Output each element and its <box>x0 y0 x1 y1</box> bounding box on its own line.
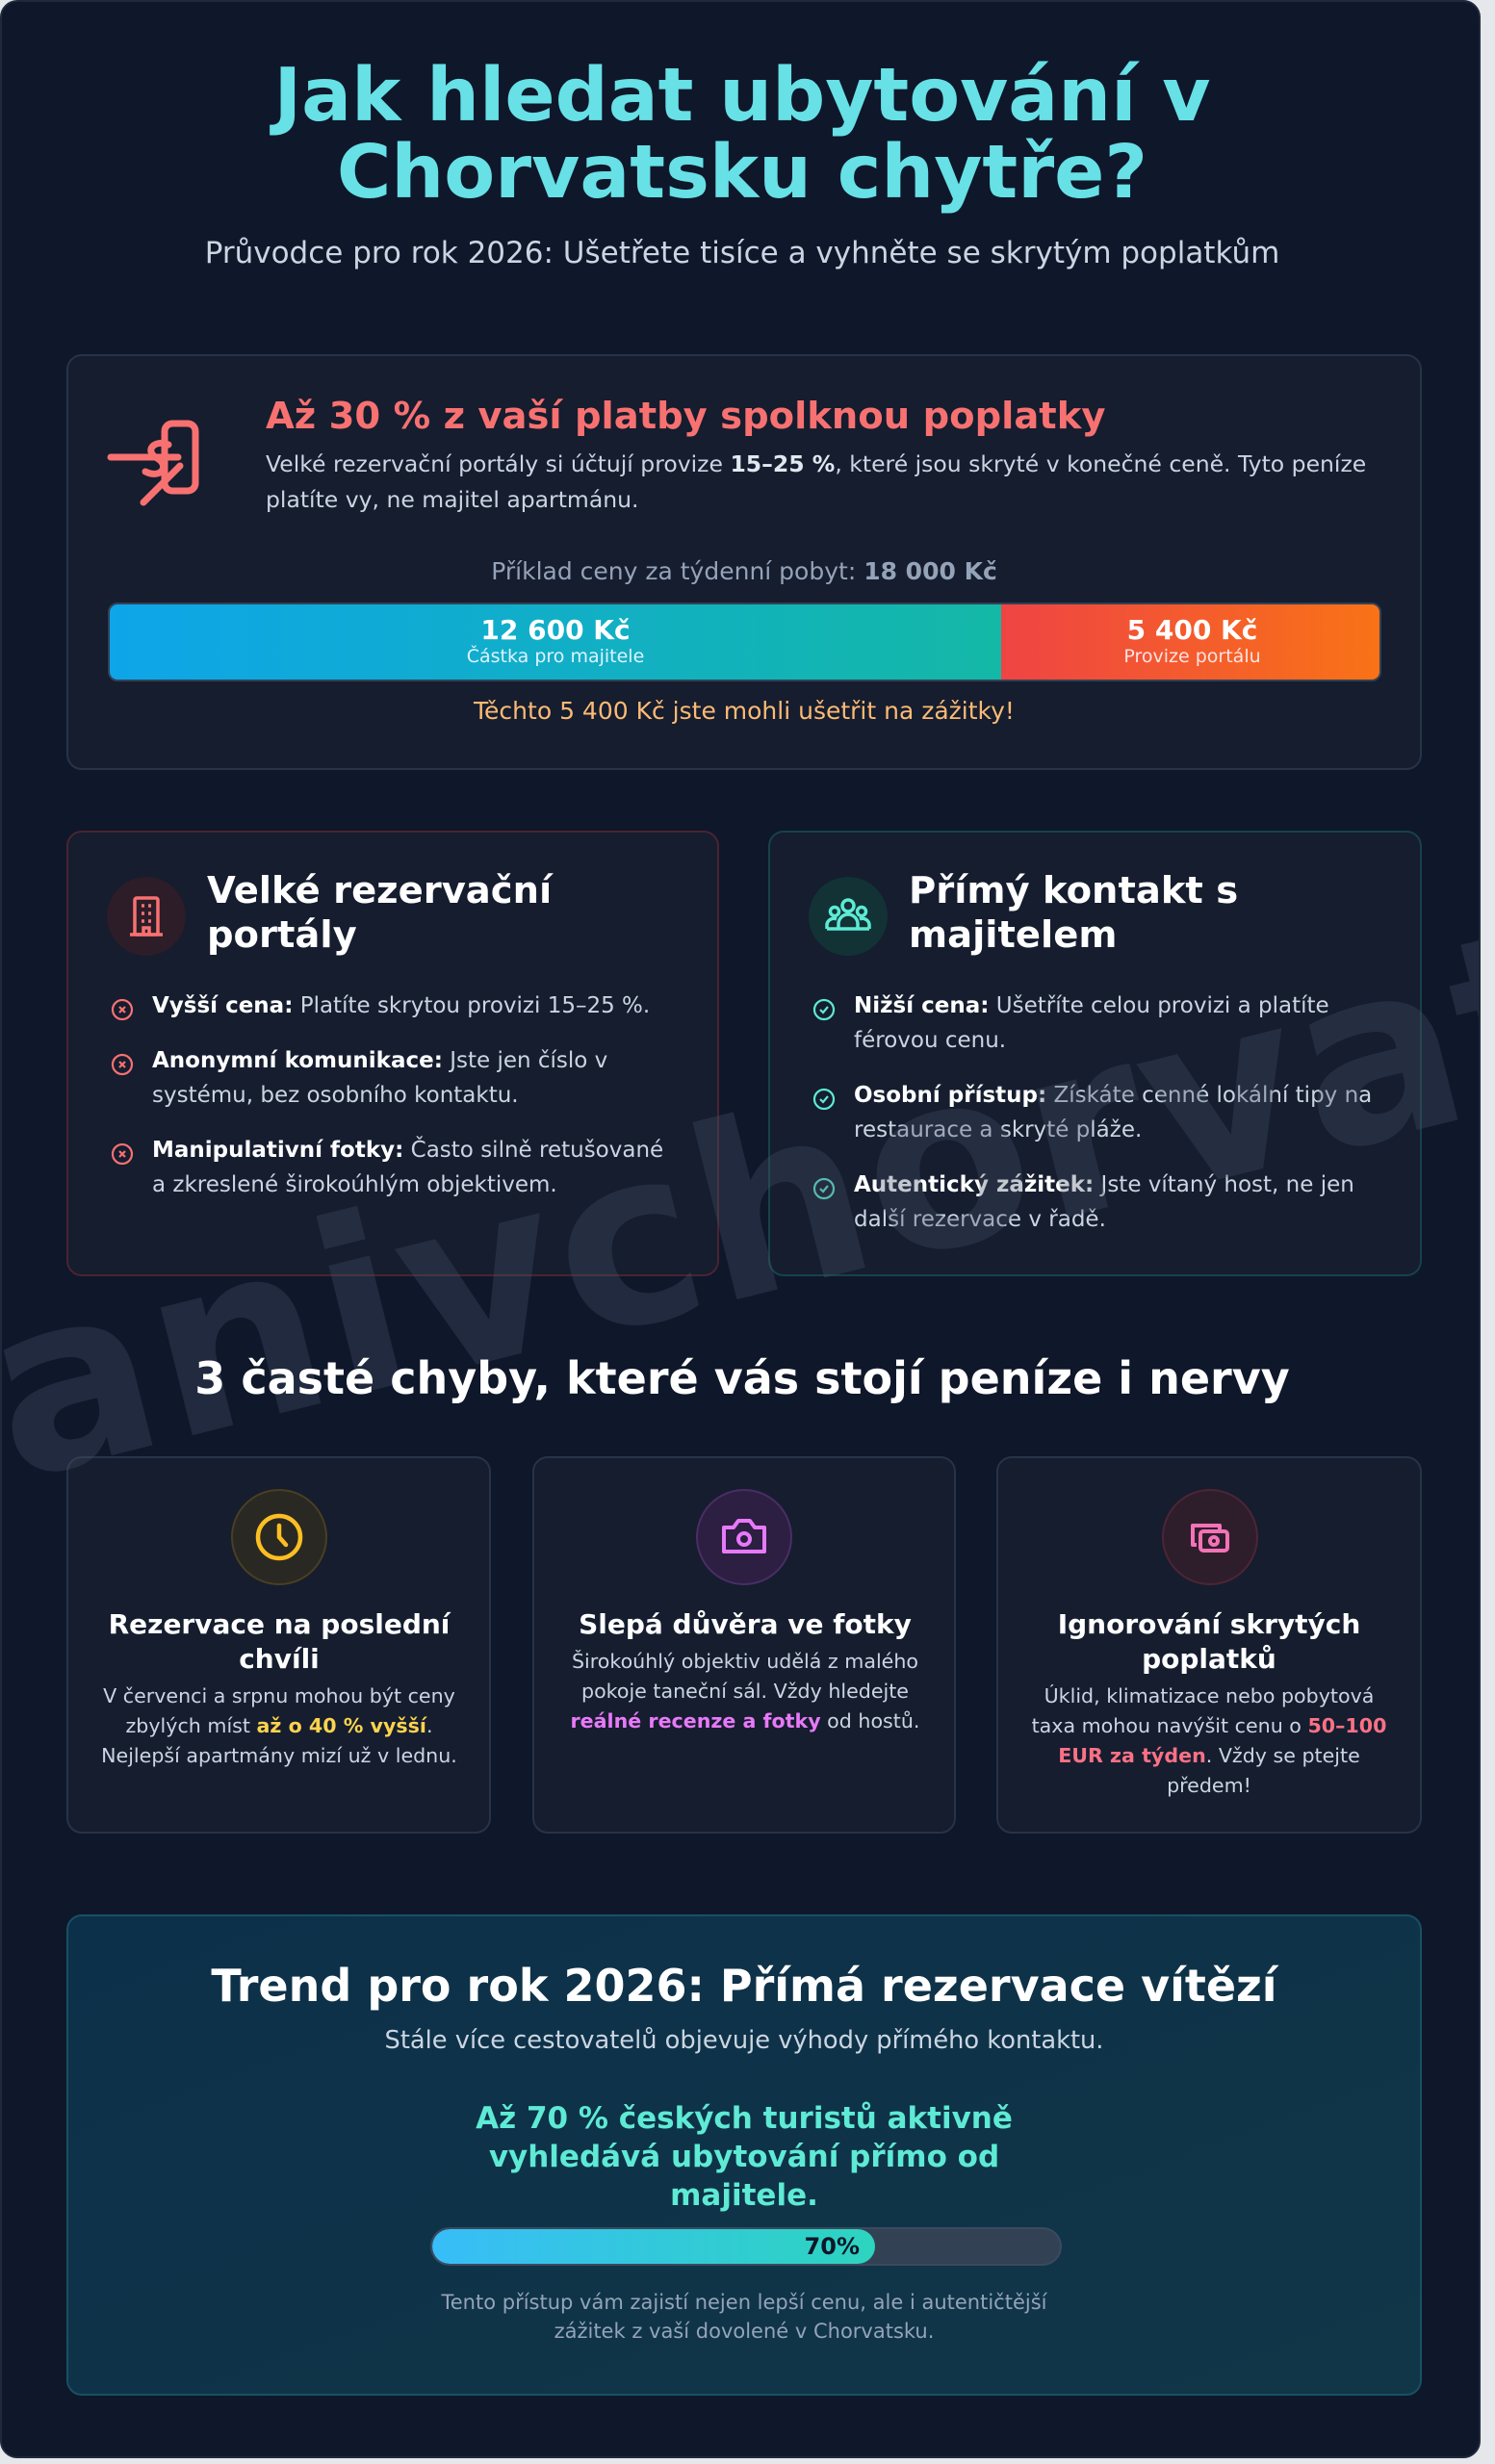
panel: direct contact <box>768 831 1422 1276</box>
heading: Přímý kontakt s <box>909 869 1238 912</box>
heading: Trend pro rok 2026: Přímá rezervace vítězí <box>211 1960 1277 2012</box>
heading: portály <box>207 913 357 957</box>
progress bar: 70%: 70% <box>805 2233 860 2260</box>
bar chart: price split <box>108 603 1381 681</box>
icon: money <box>1162 1489 1258 1585</box>
subtitle: Průvodce pro rok 2026: Ušetřete tisíce a vyhněte se skrytým poplatkům <box>205 236 1279 270</box>
heading <box>909 869 1238 957</box>
title: Jak hledat ubytování v <box>274 53 1210 139</box>
icon: people <box>809 877 888 956</box>
panel: trend 2026 <box>66 1914 1422 2396</box>
list: cons <box>112 993 663 1197</box>
icon: building <box>107 877 186 956</box>
list: pros: Autentický zážitek: Jste vítaný host, ne jen další rezervace v řadě. <box>854 1172 1354 1232</box>
card text: Úklid, klimatizace nebo pobytová taxa mohou navýšit cenu o 50–100 EUR za týden. Vždy se ptejte předem! <box>1032 1684 1386 1797</box>
title: Chorvatsku chytře? <box>337 130 1147 216</box>
list: cons: Manipulativní fotky: Často silně retušované a zkreslené širokoúhlým objektivem. <box>152 1138 663 1197</box>
card title: Ignorování skrytých poplatků <box>1058 1608 1360 1675</box>
heading: Až 30 % z vaší platby spolknou poplatky <box>266 395 1105 438</box>
bar chart: price split: Částka pro majitele <box>467 646 644 667</box>
list: pros <box>812 993 1372 1232</box>
stat text: Až 70 % českých turistů aktivně vyhledává ubytování přímo od majitele. <box>476 2101 1013 2213</box>
list: pros: Nižší cena: Ušetříte celou provizi a platíte férovou cenu. <box>854 993 1329 1053</box>
icon: money exit <box>108 420 198 506</box>
card: photos <box>532 1456 956 1834</box>
bar chart: price split: 5 400 Kč <box>1127 614 1257 646</box>
heading: majitelem <box>909 913 1117 957</box>
panel: portals <box>66 831 719 1276</box>
card text: Širokoúhlý objektiv udělá z malého pokoje taneční sál. Vždy hledejte reálné recenze a fotky od hostů. <box>571 1650 919 1732</box>
card: hidden fees <box>996 1456 1422 1834</box>
list: cons: Vyšší cena: Platíte skrytou provizi 15–25 %. <box>152 993 650 1018</box>
subtitle: Stále více cestovatelů objevuje výhody přímého kontaktu. <box>385 2026 1103 2055</box>
icon: clock <box>231 1489 327 1585</box>
price example: Příklad ceny za týdenní pobyt: 18 000 Kč <box>491 557 997 585</box>
body text: Velké rezervační portály si účtují provize 15–25 %, které jsou skryté v konečné ceně. Tyto peníze platíte vy, ne majitel apartmánu. <box>266 450 1366 513</box>
title <box>270 53 1210 216</box>
card: last minute <box>66 1456 491 1834</box>
footnote: Tento přístup vám zajistí nejen lepší cenu, ale i autentičtější zážitek z vaší dovolené v Chorvatsku. <box>441 2291 1046 2343</box>
progress bar: 70% <box>430 2227 1062 2266</box>
heading: Velké rezervační <box>207 869 552 912</box>
list: pros: Osobní přístup: Získáte cenné lokální tipy na restaurace a skryté pláže. <box>854 1083 1372 1142</box>
heading <box>207 869 554 957</box>
bar chart: price split: 12 600 Kč <box>480 614 631 646</box>
callout: Těchto 5 400 Kč jste mohli ušetřit na zážitky! <box>474 697 1015 725</box>
icon: camera <box>696 1489 792 1585</box>
panel: fees <box>66 354 1422 770</box>
card title: Slepá důvěra ve fotky <box>579 1608 912 1640</box>
card text: V červenci a srpnu mohou být ceny zbylých míst až o 40 % vyšší. Nejlepší apartmány mizí už v lednu. <box>101 1684 457 1767</box>
card title: Rezervace na poslední chvíli <box>109 1608 450 1675</box>
section heading: mistakes: 3 časté chyby, které vás stojí peníze i nervy <box>194 1352 1290 1404</box>
list: cons: Anonymní komunikace: Jste jen číslo v systému, bez osobního kontaktu. <box>152 1048 607 1108</box>
bar chart: price split: Provize portálu <box>1123 646 1261 667</box>
